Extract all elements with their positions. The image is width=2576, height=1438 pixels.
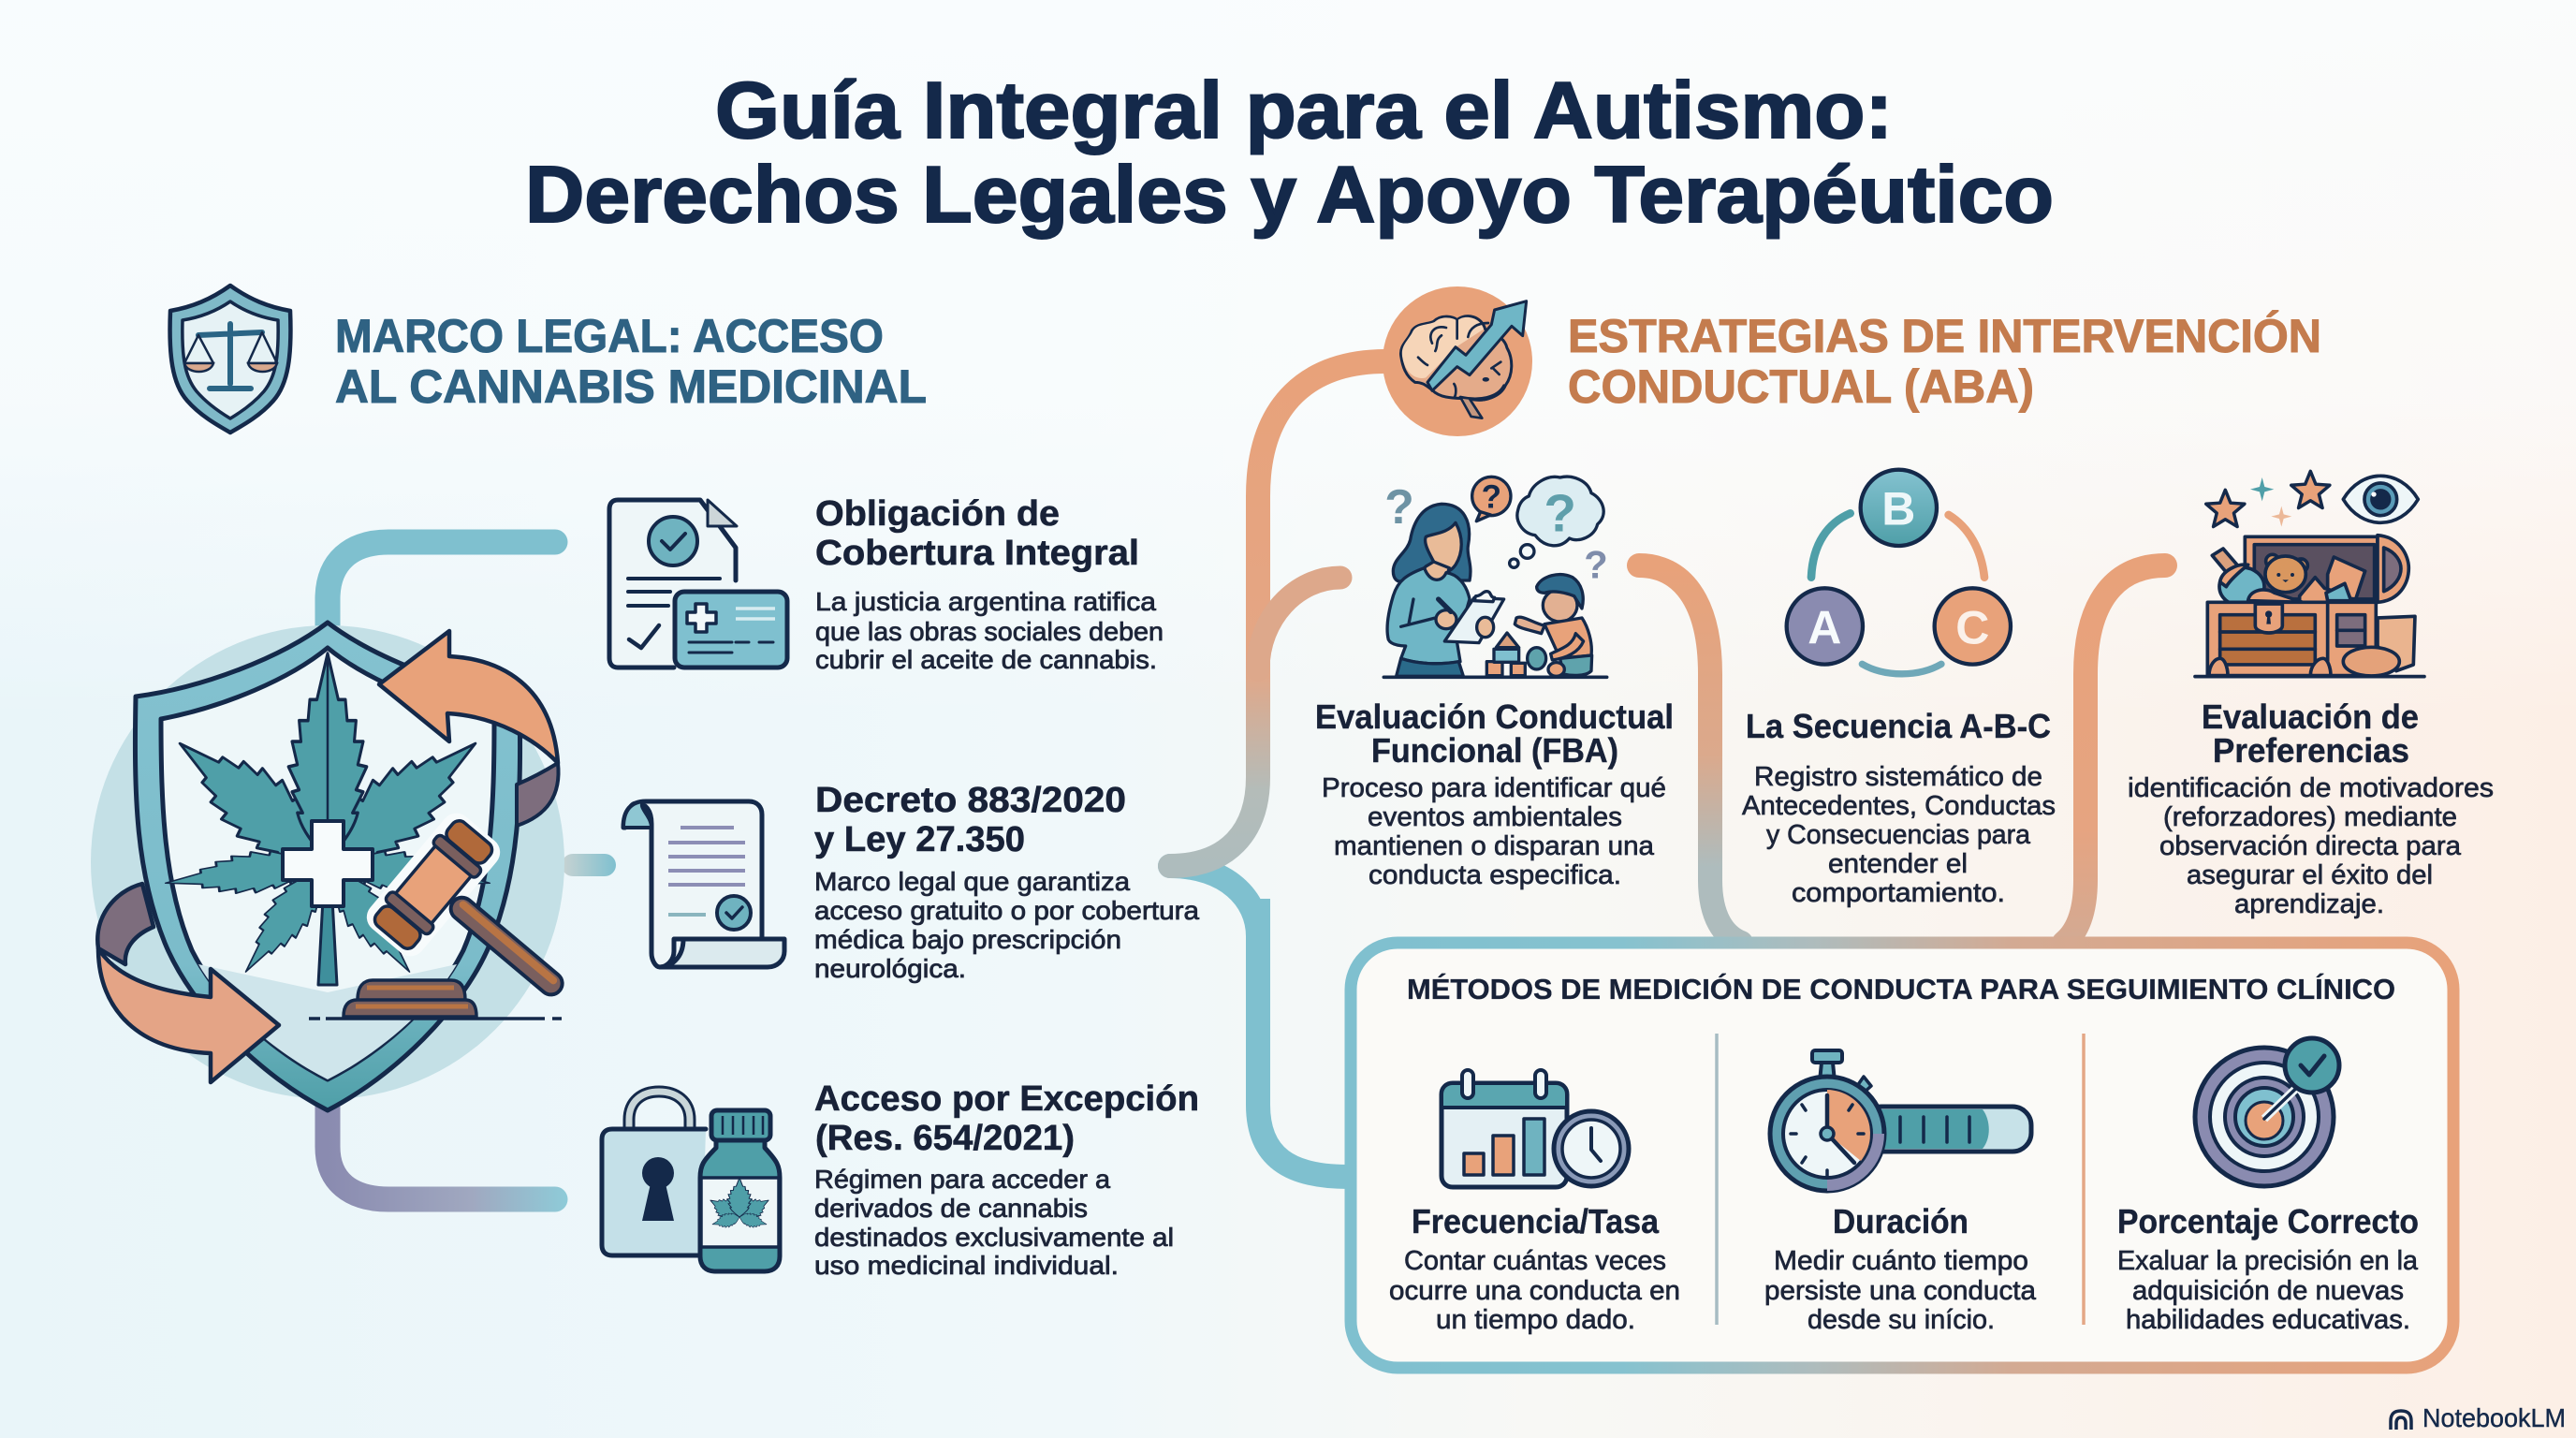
- question marks: ?: [1544, 485, 1576, 544]
- text: preferencias: (reforzadores) mediante: [2163, 802, 2457, 832]
- heading: métodos: MÉTODOS DE MEDICIÓN DE CONDUCTA PARA SEGUIMIENTO CLÍNICO: [1407, 972, 2395, 1005]
- heading: estrategias: [1568, 310, 2321, 413]
- question marks: ?: [1584, 542, 1608, 586]
- arrow bottom: [97, 884, 154, 964]
- text: decreto 883/2020: Marco legal que garantiza: [814, 867, 1130, 896]
- diagram: A-B-C cycle: [1787, 470, 2011, 674]
- text: porcentaje correcto: habilidades educativas.: [2126, 1305, 2410, 1335]
- text: decreto 883/2020: acceso gratuito o por cobertura: [814, 896, 1199, 925]
- text: obligación de cobertura integral: Obligación de: [815, 494, 1060, 534]
- text: decreto 883/2020: neurológica.: [814, 954, 966, 983]
- gavel base: [344, 980, 476, 1017]
- title: Guía Integral para el Autismo:: [715, 66, 1893, 155]
- arrow top: [517, 763, 559, 826]
- text: FBA: Proceso para identificar qué: [1322, 773, 1666, 803]
- title: Derechos Legales y Apoyo Terapéutico: [525, 151, 2054, 240]
- illustration: functional behavioural assessment: [1383, 477, 1608, 677]
- text: secuencia ABC: Registro sistemático de: [1754, 762, 2042, 792]
- text: decreto 883/2020: Decreto 883/2020: [815, 781, 1126, 820]
- text: duración: desde su início.: [1808, 1305, 1995, 1335]
- question marks: ?: [1384, 479, 1414, 534]
- text: FBA: conducta especifica.: [1368, 860, 1621, 890]
- text: duración: [1764, 1202, 2037, 1335]
- text: obligación de cobertura integral: que las obras sociales deben: [815, 617, 1164, 646]
- question marks: ?: [1482, 479, 1501, 516]
- heading: marco legal: AL CANNABIS MEDICINAL: [335, 360, 927, 413]
- text: obligación de cobertura integral: [815, 494, 1164, 674]
- text: preferencias: asegurar el éxito del: [2187, 860, 2433, 890]
- text: porcentaje correcto: adquisición de nuevas: [2132, 1276, 2404, 1306]
- text: porcentaje correcto: Exaluar la precisión en la: [2117, 1246, 2419, 1276]
- connectors: central bracket: [1170, 361, 2165, 1177]
- illustration: treasure chest of preferences: [2195, 471, 2424, 677]
- icon: document with medical card: [609, 500, 787, 668]
- heading: estrategias: ESTRATEGIAS DE INTERVENCIÓN: [1568, 310, 2321, 362]
- text: preferencias: aprendizaje.: [2234, 889, 2384, 919]
- text: frecuencia: ocurre una conducta en: [1389, 1276, 1680, 1306]
- node B: B: [1881, 482, 1915, 535]
- text: preferencias: observación directa para: [2159, 831, 2462, 861]
- text: secuencia ABC: comportamiento.: [1792, 878, 2005, 908]
- text: secuencia ABC: Antecedentes, Conductas: [1742, 791, 2056, 821]
- text: preferencias: identificación de motivadores: [2128, 773, 2494, 803]
- text: frecuencia: un tiempo dado.: [1436, 1305, 1635, 1335]
- text: acceso por excepción: destinados exclusivamente al: [814, 1223, 1174, 1252]
- text: preferencias: Preferencias: [2213, 731, 2409, 770]
- panel: marco legal: [91, 286, 1199, 1280]
- text: secuencia ABC: y Consecuencias para: [1766, 820, 2031, 850]
- text: acceso por excepción: Régimen para acceder a: [814, 1165, 1110, 1194]
- panel: estrategias ABA: [1315, 286, 2494, 919]
- text: duración: persiste una conducta: [1764, 1276, 2037, 1306]
- text: obligación de cobertura integral: Cobertura Integral: [815, 534, 1139, 573]
- text: frecuencia: [1389, 1202, 1680, 1335]
- heading: marco legal: [335, 310, 927, 413]
- icon: stopwatch with progress bar: [1770, 1050, 2031, 1191]
- icon: target with check pin: [2195, 1038, 2339, 1186]
- icon: legal scroll: [623, 801, 784, 967]
- text: preferencias: [2128, 697, 2494, 919]
- text: secuencia ABC: entender el: [1828, 849, 1968, 879]
- text: acceso por excepción: (Res. 654/2021): [815, 1119, 1075, 1158]
- text: frecuencia: Contar cuántas veces: [1404, 1246, 1666, 1276]
- text: acceso por excepción: Acceso por Excepción: [814, 1079, 1199, 1119]
- text: decreto 883/2020: médica bajo prescripción: [814, 925, 1121, 954]
- icon: brain with rising arrow: [1383, 286, 1532, 436]
- text: duración: Medir cuánto tiempo: [1774, 1246, 2028, 1276]
- illustration: shield, cannabis leaf and gavel: [91, 623, 607, 1110]
- text: acceso por excepción: uso medicinal individual.: [814, 1251, 1119, 1280]
- node C: C: [1955, 601, 1989, 653]
- heading: estrategias: CONDUCTUAL (ABA): [1568, 360, 2034, 413]
- panel: métodos de medición: [1351, 943, 2453, 1368]
- text: FBA: Funcional (FBA): [1371, 731, 1618, 770]
- logo: NotebookLM: NotebookLM: [2422, 1403, 2566, 1432]
- text: preferencias: Evaluación de: [2202, 697, 2419, 736]
- text: porcentaje correcto: Porcentaje Correcto: [2117, 1202, 2419, 1240]
- icon: shield with scales: [170, 286, 290, 433]
- title: [525, 66, 2054, 240]
- text: acceso por excepción: [814, 1079, 1199, 1280]
- text: decreto 883/2020: [814, 781, 1199, 983]
- text: porcentaje correcto: [2117, 1202, 2419, 1335]
- text: obligación de cobertura integral: cubrir el aceite de cannabis.: [815, 645, 1157, 674]
- heading: marco legal: MARCO LEGAL: ACCESO: [335, 310, 884, 362]
- question marks: [1384, 479, 1608, 586]
- node B: [1861, 470, 1937, 546]
- text: FBA: Evaluación Conductual: [1315, 697, 1674, 736]
- node C: [1935, 588, 2011, 665]
- gavel: [360, 807, 607, 1047]
- text: FBA: eventos ambientales: [1368, 802, 1622, 832]
- icon: calendar with bars and clock: [1442, 1070, 1629, 1187]
- text: duración: Duración: [1833, 1202, 1969, 1240]
- text: secuencia ABC: La Secuencia A-B-C: [1746, 707, 2051, 745]
- text: obligación de cobertura integral: La justicia argentina ratifica: [815, 587, 1156, 616]
- icon: lock and medicine bottle: [602, 1092, 780, 1271]
- connectors: left branches: [328, 542, 605, 1199]
- node A: [1787, 588, 1863, 665]
- text: frecuencia: Frecuencia/Tasa: [1412, 1202, 1660, 1240]
- leaf: [157, 653, 498, 985]
- text: FBA: mantienen o disparan una: [1334, 831, 1655, 861]
- text: secuencia ABC: [1742, 707, 2056, 908]
- text: FBA: [1315, 697, 1674, 890]
- node A: A: [1808, 601, 1841, 653]
- text: decreto 883/2020: y Ley 27.350: [814, 820, 1025, 859]
- text: acceso por excepción: derivados de cannabis: [814, 1194, 1088, 1223]
